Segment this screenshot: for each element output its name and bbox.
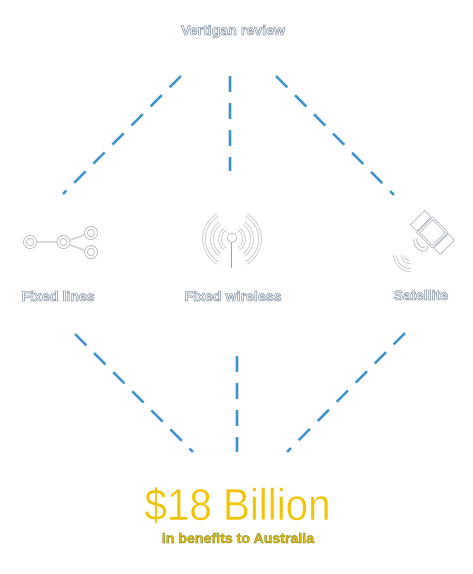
arrow: review to fixed wireless <box>229 76 231 171</box>
arrow: fixed lines to benefits <box>75 334 193 452</box>
label: Satellite: Satellite <box>394 288 448 304</box>
label: Fixed wireless: Fixed wireless <box>184 289 282 305</box>
icon: fixed lines network <box>24 226 98 258</box>
arrow: satellite to benefits <box>287 333 405 452</box>
label: Fixed lines: Fixed lines <box>21 289 95 305</box>
arrow: fixed wireless to benefits <box>236 356 238 452</box>
headline figure: $18 Billion: $18 Billion <box>144 481 330 530</box>
arrow: review to satellite <box>276 76 394 195</box>
icon: satellite <box>395 210 455 270</box>
icon: fixed wireless antenna <box>204 215 260 268</box>
title: Vertigan review: Vertigan review <box>181 23 286 39</box>
arrow: review to fixed lines <box>63 76 181 194</box>
subheading: in benefits to Australia: in benefits to Australia <box>162 531 314 547</box>
